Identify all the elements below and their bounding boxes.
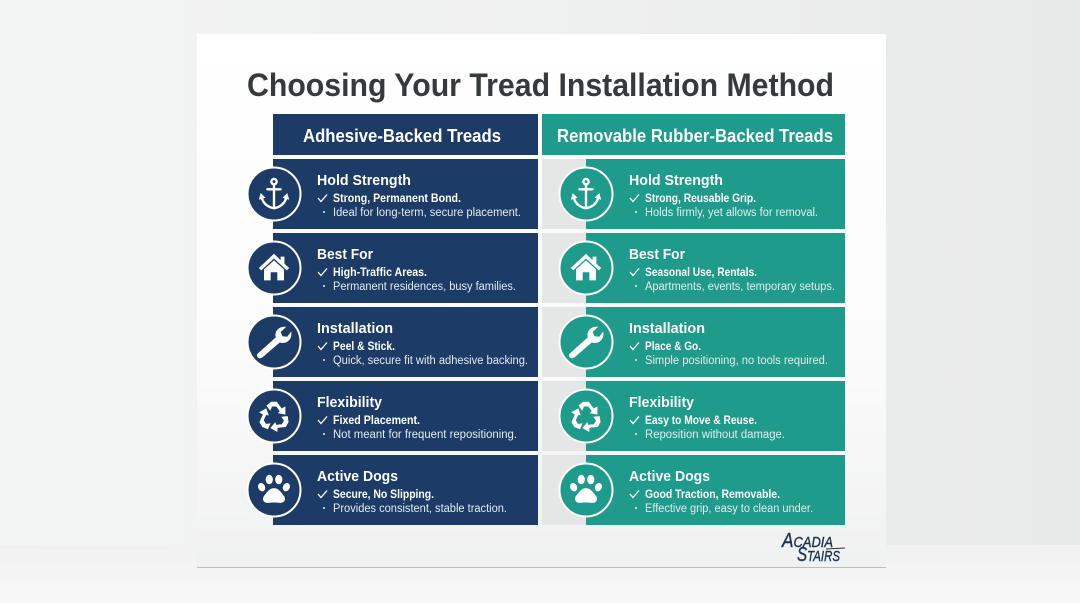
panel: adhesive installation: Peel & Stick. <box>333 341 395 353</box>
panel: adhesive active dogs: Provides consistent, stable traction. <box>333 503 507 515</box>
panel: adhesive installation: Installation <box>317 321 393 337</box>
panel: removable flexibility: Easy to Move & Reuse. <box>645 415 757 427</box>
column header: adhesive-backed treads: Adhesive-Backed Treads <box>303 126 501 146</box>
panel: removable active dogs <box>542 455 845 525</box>
icon: paw <box>560 464 612 516</box>
panel: removable flexibility <box>542 381 845 451</box>
logo: Acadia Stairs: STAIRS <box>797 544 840 566</box>
icon: wrench <box>560 316 612 368</box>
panel: removable flexibility: Flexibility <box>629 395 694 411</box>
panel: removable active dogs: Effective grip, easy to clean under. <box>645 503 813 515</box>
panel: adhesive active dogs: Active Dogs <box>317 469 398 485</box>
icon: recycle <box>560 390 612 442</box>
logo: Acadia Stairs <box>781 530 845 566</box>
panel: removable best for: Seasonal Use, Rentals. <box>645 267 757 279</box>
icon: anchor <box>248 168 300 220</box>
panel: removable best for <box>542 233 845 303</box>
panel: removable installation <box>542 307 845 377</box>
panel: adhesive best for <box>248 233 538 303</box>
panel: adhesive flexibility: Flexibility <box>317 395 382 411</box>
panel: adhesive best for: Best For <box>317 247 373 263</box>
panel: removable installation: Simple positioning, no tools required. <box>645 355 828 367</box>
floor <box>0 545 1080 603</box>
icon: anchor <box>560 168 612 220</box>
poster board <box>197 34 886 568</box>
icon: wrench <box>248 316 300 368</box>
panel: adhesive hold strength <box>248 159 538 229</box>
panel: adhesive installation: Quick, secure fit with adhesive backing. <box>333 355 528 367</box>
column header: removable rubber-backed treads <box>542 114 845 155</box>
panel: removable best for: Best For <box>629 247 685 263</box>
panel: adhesive flexibility: Not meant for frequent repositioning. <box>333 429 517 441</box>
panel: removable active dogs: Good Traction, Removable. <box>645 489 780 501</box>
panel: removable hold strength: Hold Strength <box>629 173 723 189</box>
panel: adhesive hold strength: Strong, Permanent Bond. <box>333 193 461 205</box>
panel: removable active dogs: Active Dogs <box>629 469 710 485</box>
panel: adhesive flexibility: Fixed Placement. <box>333 415 420 427</box>
panel: removable hold strength: Holds firmly, yet allows for removal. <box>645 207 818 219</box>
logo: Acadia Stairs: ACADIA <box>781 530 833 552</box>
panel: adhesive best for: Permanent residences, busy families. <box>333 281 516 293</box>
icon: house <box>248 242 300 294</box>
panel: removable hold strength <box>542 159 845 229</box>
panel: adhesive active dogs: Secure, No Slipping. <box>333 489 434 501</box>
panel: removable hold strength: Strong, Reusable Grip. <box>645 193 756 205</box>
column header: adhesive-backed treads <box>273 114 538 155</box>
panel: adhesive best for: High-Traffic Areas. <box>333 267 427 279</box>
panel: removable flexibility: Reposition without damage. <box>645 429 785 441</box>
panel: adhesive flexibility <box>248 381 538 451</box>
panel: adhesive hold strength: Ideal for long-term, secure placement. <box>333 207 521 219</box>
panel: removable installation: Place & Go. <box>645 341 701 353</box>
icon: recycle <box>248 390 300 442</box>
column header: removable rubber-backed treads: Removable Rubber-Backed Treads <box>557 126 833 146</box>
panel: adhesive active dogs <box>248 455 538 525</box>
panel: removable best for: Apartments, events, temporary setups. <box>645 281 835 293</box>
icon: house <box>560 242 612 294</box>
icon: paw <box>248 464 300 516</box>
panel: adhesive hold strength: Hold Strength <box>317 173 411 189</box>
title: Choosing Your Tread Installation Method <box>247 67 834 103</box>
panel: removable installation: Installation <box>629 321 705 337</box>
panel: adhesive installation <box>248 307 538 377</box>
